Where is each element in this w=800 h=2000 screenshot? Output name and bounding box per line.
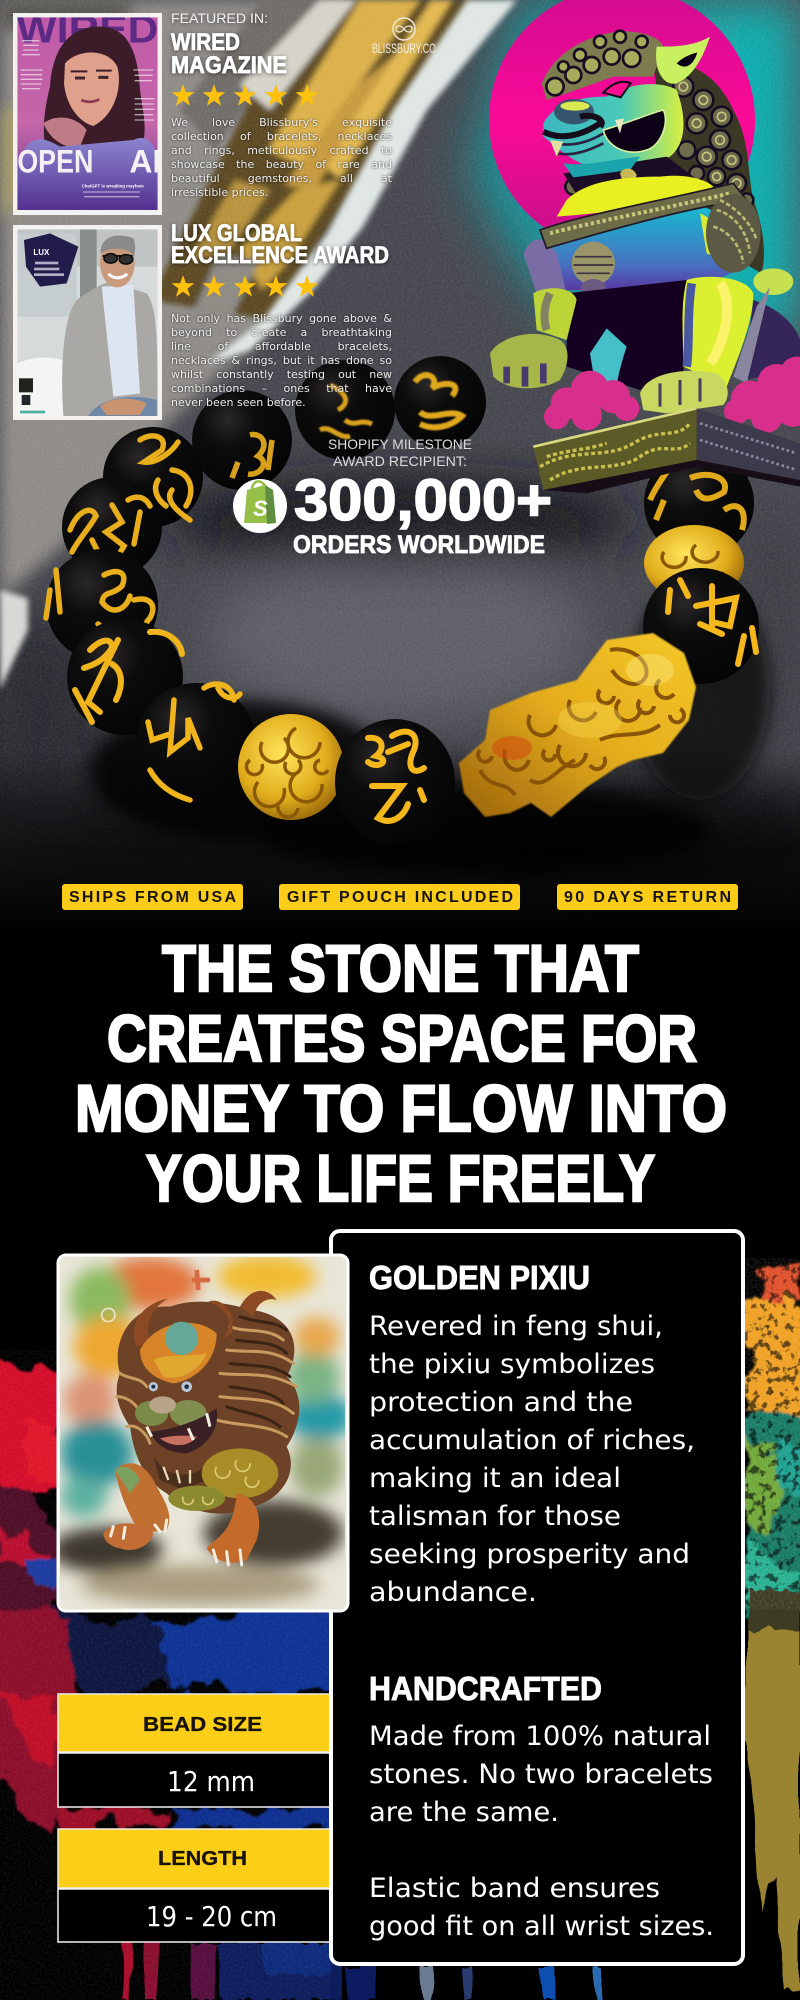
text: pixiu description: Revered in feng shui, (369, 1311, 663, 1342)
length value (58, 1889, 330, 1942)
order count: 300,000+ (294, 468, 552, 533)
fabric shading (0, 478, 800, 890)
text: Wired review (170, 116, 393, 199)
main title: THE STONE THAT (162, 931, 639, 1005)
text: Wired review: irresistible prices. (171, 186, 268, 199)
watercolor washes (50, 1255, 353, 1605)
collar (540, 183, 747, 248)
main title: YOUR LIFE FREELY (146, 1141, 655, 1215)
cover headline: OPEN (17, 144, 93, 180)
gold ball (238, 714, 344, 820)
milestone caption (328, 436, 472, 469)
stars: Wired (172, 84, 318, 106)
text: handcrafted description (369, 1721, 714, 1942)
award heading: LUX GLOBAL (171, 220, 302, 247)
bottom drips (120, 1942, 604, 2000)
top row beads (192, 390, 292, 490)
main title: CREATES SPACE FOR (107, 1001, 697, 1075)
length label (58, 1829, 330, 1888)
spec table (58, 1694, 330, 1942)
text: Wired review: and rings, meticulously crafted to (171, 144, 392, 157)
bead size value: 12 mm (167, 1765, 255, 1798)
badge: ships: SHIPS FROM USA (69, 889, 236, 906)
text: Wired review: We love Blissbury's exquisite (171, 116, 392, 129)
featured-in heading: WIRED (171, 29, 240, 56)
text: Wired review: showcase the beauty of rare and (171, 158, 392, 171)
golden pixiu charm (459, 633, 696, 817)
pink clouds (544, 357, 800, 433)
dark belly void (567, 280, 687, 390)
body scales (202, 1448, 278, 1498)
text: pixiu description: abundance. (369, 1577, 537, 1608)
badge: gift pouch: GIFT POUCH INCLUDED (287, 889, 513, 906)
right beads (644, 448, 754, 558)
text: pixiu description: accumulation of riches, (369, 1425, 695, 1456)
chest (557, 176, 713, 217)
orders label: ORDERS WORLDWIDE (293, 531, 545, 559)
text: Lux review: whilst constantly testing out new (171, 368, 392, 381)
text: Lux review: beyond to create a breathtaking (171, 326, 392, 339)
bead size value (58, 1753, 330, 1807)
award heading (171, 220, 389, 269)
featured-in heading: FEATURED IN: (171, 10, 268, 26)
paint splash: right (745, 1258, 800, 1990)
heading: golden pixiu: GOLDEN PIXIU (369, 1259, 590, 1296)
length value: 19 - 20 cm (146, 1900, 277, 1933)
cover masthead: WIRED (17, 8, 158, 52)
text: pixiu description: making it an ideal (369, 1463, 621, 1494)
badge: ships (62, 884, 243, 910)
face (543, 84, 683, 167)
logo: Blissbury (372, 18, 436, 56)
ear (656, 37, 710, 84)
text: pixiu description: seeking prosperity and (369, 1539, 690, 1570)
text: handcrafted description: stones. No two bracelets (369, 1759, 713, 1790)
text: handcrafted description: are the same. (369, 1797, 559, 1828)
blurred grey surface at top left (0, 0, 360, 600)
award badge: LUX (33, 248, 50, 257)
badge: gift pouch (279, 884, 520, 910)
magazine card: Wired (13, 8, 162, 215)
text: handcrafted description: Made from 100% natural (369, 1721, 711, 1752)
centre bead (335, 719, 455, 845)
text: Lux review: combinations – ones that have (171, 382, 392, 395)
woven gold strap (150, 0, 475, 320)
magenta sun (489, 0, 755, 253)
text: Lux review: necklaces & rings, but it has done so (171, 354, 392, 367)
text: Lux review: Not only has Blissbury gone above & (171, 312, 392, 325)
text: pixiu description (369, 1311, 695, 1608)
head crest (140, 1323, 217, 1383)
text: handcrafted description: good fit on all wrist sizes. (369, 1911, 714, 1942)
teal backdrop (470, 0, 800, 345)
beard (154, 1457, 204, 1488)
hero photo background (0, 0, 800, 931)
award heading: EXCELLENCE AWARD (171, 242, 389, 269)
main title: MONEY TO FLOW INTO (75, 1071, 727, 1145)
creature mane (117, 1302, 299, 1514)
text: Lux review (170, 312, 392, 409)
stars: Lux (172, 275, 318, 297)
bell (572, 242, 615, 285)
forelegs (115, 1463, 169, 1533)
icon: shopify bag (233, 479, 287, 533)
milestone caption: SHOPIFY MILESTONE (328, 436, 472, 452)
magazine card: Wired: AI (129, 144, 161, 180)
panel: description (331, 1231, 743, 1964)
text: Lux review: line of affordable bracelets, (171, 340, 392, 353)
featured-in heading: MAGAZINE (171, 52, 287, 79)
text: pixiu description: talisman for those (369, 1501, 621, 1532)
crown curls (542, 31, 663, 100)
bracelet beads (46, 356, 770, 875)
pedestal (533, 408, 697, 490)
man (62, 282, 158, 416)
watercolor pixiu card (50, 1255, 353, 1611)
badge: returns: 90 DAYS RETURN (564, 889, 731, 906)
milestone caption: AWARD RECIPIENT: (333, 453, 467, 469)
bead size label: BEAD SIZE (143, 1713, 262, 1736)
text: Lux review: never been seen before. (171, 396, 306, 409)
muzzle (135, 1401, 168, 1426)
text: Wired review: collection of bracelets, necklaces (171, 130, 392, 143)
heading: handcrafted: HANDCRAFTED (369, 1670, 602, 1707)
length label: LENGTH (158, 1847, 247, 1870)
text: pixiu description: protection and the (369, 1387, 633, 1418)
badge: returns (557, 884, 738, 910)
tail (753, 268, 793, 295)
featured-in heading (171, 10, 287, 79)
paint splash: left red and blue (0, 1350, 604, 2000)
foo dog illustration (490, 31, 800, 493)
paws (490, 334, 567, 388)
text: handcrafted description: Elastic band ensures (369, 1873, 660, 1904)
horns (134, 1291, 277, 1347)
logo: Blissbury: BLISSBURY.CO (372, 40, 436, 56)
white object at left edge (0, 590, 28, 690)
belly (552, 208, 733, 290)
text: Wired review: beautiful gemstones, all at (171, 172, 392, 185)
text: pixiu description: the pixiu symbolizes (369, 1349, 655, 1380)
bead size label (58, 1694, 330, 1752)
cover subhead: ChatGPT is wreaking mayhem (82, 183, 144, 188)
back mane (653, 62, 764, 273)
mouth (150, 1408, 217, 1453)
jaw shadow (563, 156, 696, 193)
specks (102, 1308, 115, 1322)
legs (533, 288, 577, 340)
award card: Lux (13, 225, 162, 420)
bottom dark fade (0, 750, 800, 931)
icon: shopify bag: S (253, 496, 268, 521)
eyes (149, 1382, 158, 1391)
shopify milestone block (233, 436, 552, 559)
left beads (103, 427, 203, 527)
white diagonal band (205, 0, 517, 365)
badges row (62, 884, 738, 910)
main title (75, 931, 727, 1215)
